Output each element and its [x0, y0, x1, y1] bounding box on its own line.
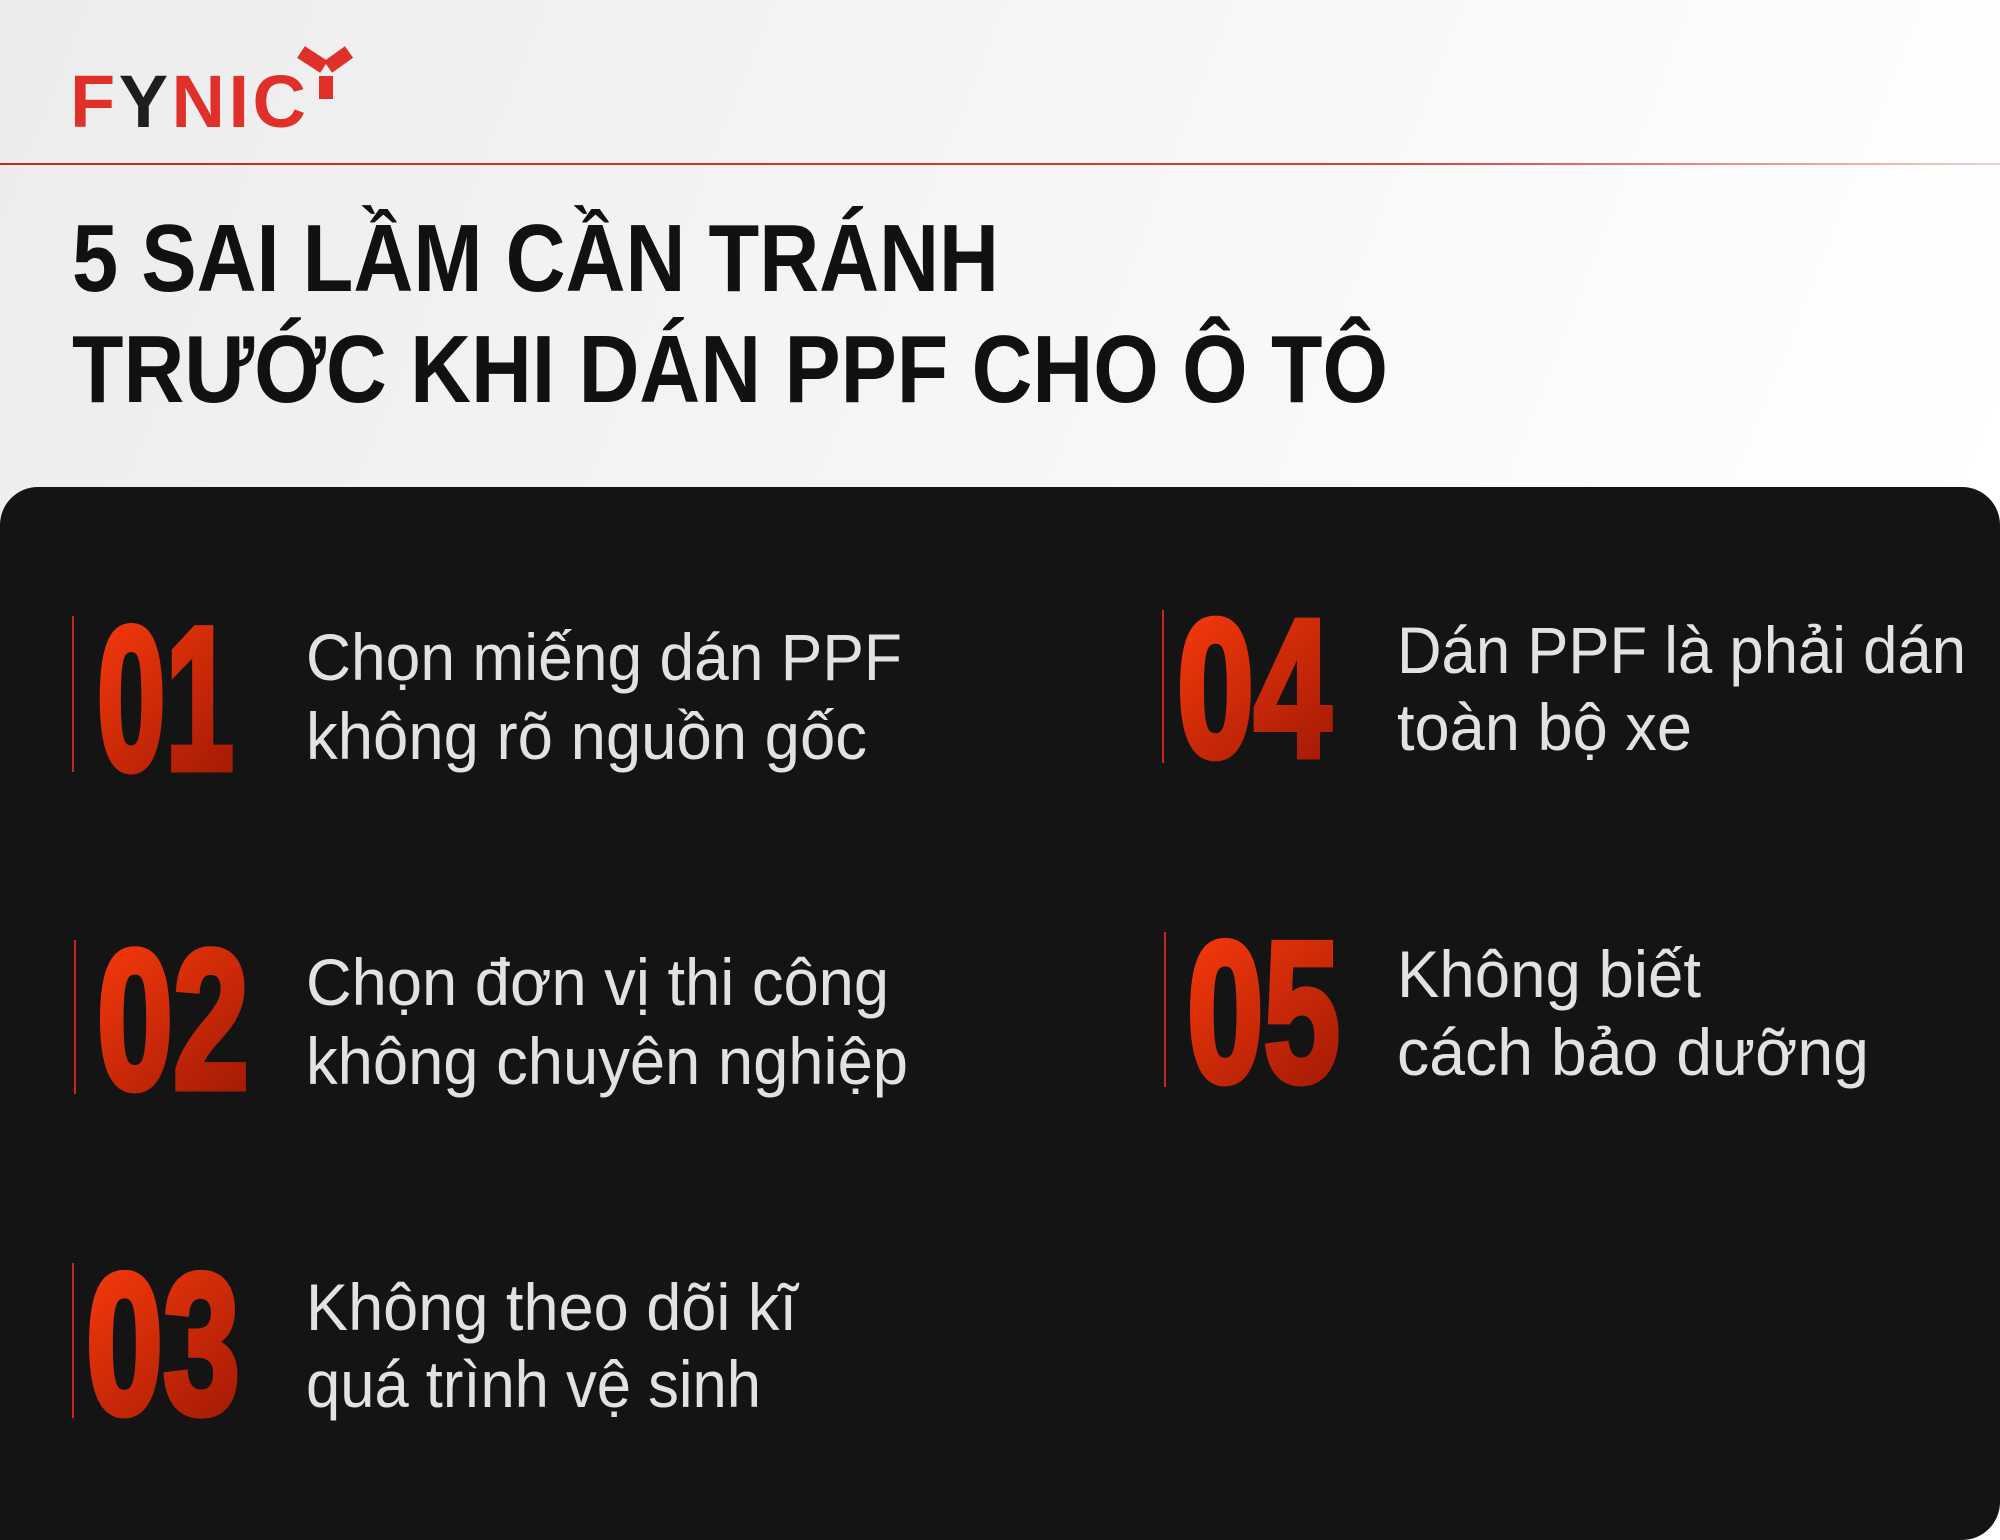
item 03: quá trình vệ sinh [306, 1347, 761, 1421]
item 01: không rõ nguồn gốc [306, 699, 867, 773]
item 04: 04 [1177, 579, 1331, 798]
item 04: Dán PPF là phải dán [1397, 613, 1966, 687]
item 05: cách bảo dưỡng [1397, 1015, 1869, 1089]
item 01: Chọn miếng dán PPF [306, 620, 902, 694]
item 03: 03 [86, 1233, 240, 1456]
item 01 [72, 585, 902, 813]
item 05: Không biết [1397, 937, 1701, 1011]
item 04: toàn bộ xe [1397, 690, 1692, 764]
panel: dark list [0, 487, 2000, 1540]
item 02: không chuyên nghiệp [306, 1024, 908, 1098]
icon: logo mark [301, 52, 349, 99]
item 03: Không theo dõi kĩ [306, 1270, 800, 1344]
title: 5 SAI LẦM CẦN TRÁNH [72, 204, 999, 312]
logo: FYNIC: FYNIC [70, 60, 306, 143]
item 05: 05 [1187, 901, 1340, 1124]
title: TRƯỚC KHI DÁN PPF CHO Ô TÔ [72, 315, 1388, 423]
item 02: 02 [97, 909, 249, 1130]
item 03 [72, 1233, 800, 1456]
title [72, 204, 1388, 423]
item 05 [1164, 901, 1869, 1124]
item 02 [74, 909, 908, 1130]
item 04 [1162, 579, 1966, 798]
item 02: Chọn đơn vị thi công [306, 945, 889, 1019]
item 01: 01 [97, 585, 234, 813]
